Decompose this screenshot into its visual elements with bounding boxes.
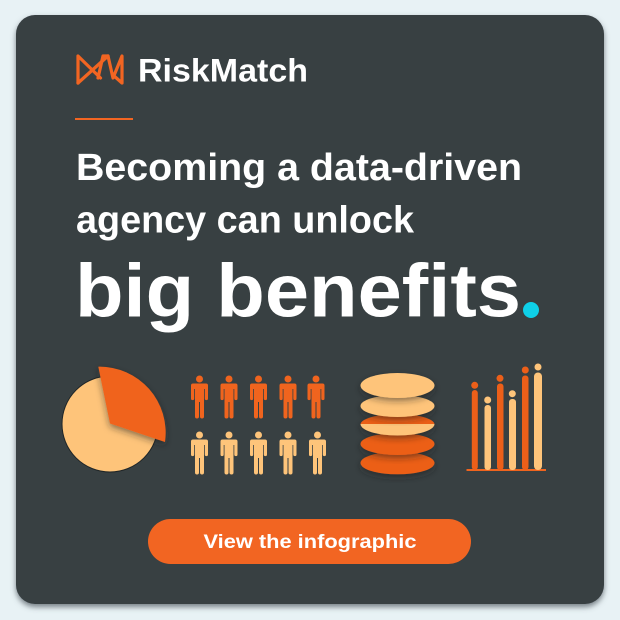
accent divider (75, 118, 133, 120)
heading (75, 147, 522, 332)
button: view the infographic (148, 519, 471, 564)
heading line 1: Becoming a data-driven (76, 147, 522, 189)
pie chart (62, 367, 166, 472)
cream bars (484, 364, 542, 470)
bar chart (466, 364, 546, 471)
database stack (360, 373, 434, 474)
orange bars (471, 366, 529, 470)
people pictogram (191, 376, 326, 474)
pie highlighted slice (98, 367, 166, 442)
logo (78, 52, 308, 88)
baseline (466, 469, 546, 471)
orange row (191, 376, 324, 418)
button: view the infographic: View the infographic (204, 532, 417, 553)
teal full stop (523, 302, 539, 318)
heading emphasis: big benefits (75, 248, 521, 332)
heading line 2: agency can unlock (76, 200, 415, 242)
wordmark: RiskMatch (138, 52, 308, 88)
icon: RiskMatch bow-tie mark (78, 56, 122, 83)
cream row (191, 432, 326, 474)
pie base (62, 376, 158, 472)
half-filled disc (360, 414, 434, 436)
